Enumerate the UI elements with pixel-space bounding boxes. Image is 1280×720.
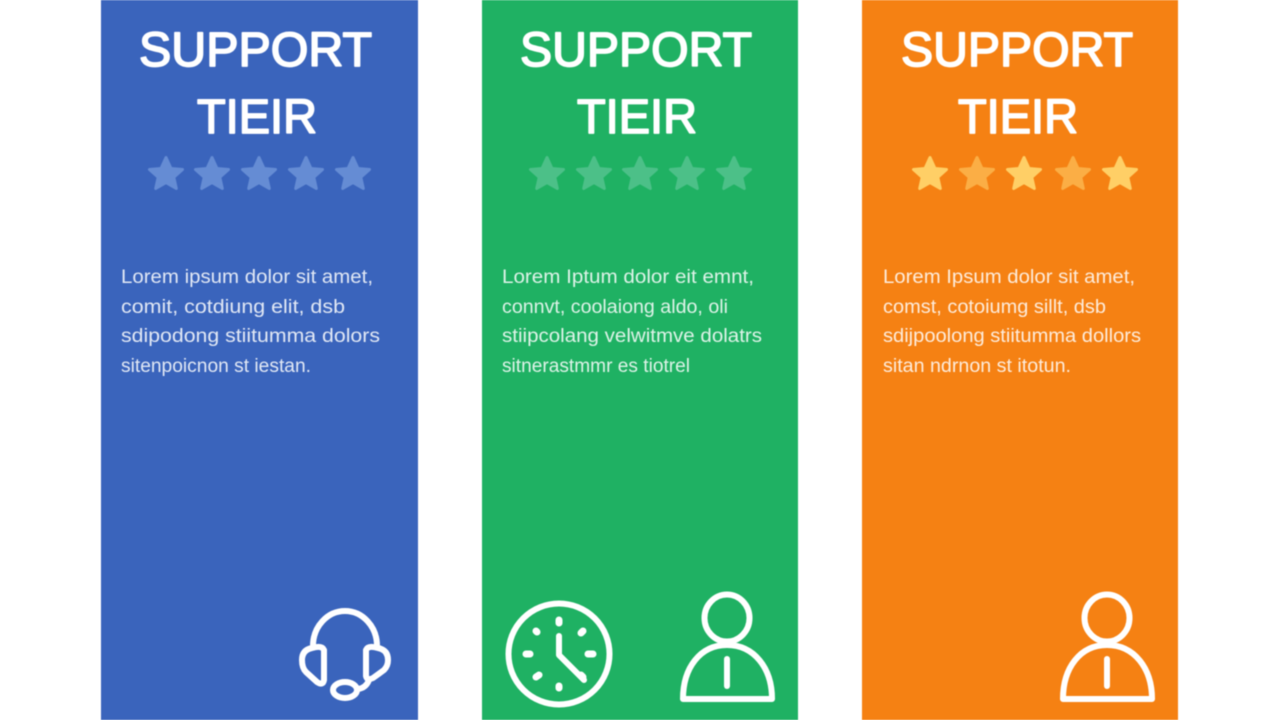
icon: person [1063, 594, 1152, 699]
green heading [520, 24, 752, 144]
green heading: TIEIR [577, 91, 697, 144]
orange body text: Lorem Ipsum dolor sit amet, [883, 267, 1135, 288]
icon: headset [302, 611, 388, 698]
green body text: Lorem Iptum dolor eit emnt, [502, 267, 754, 288]
green body text: sitnerastmmr es tiotrel [502, 356, 690, 377]
green body text: connvt, coolaiong aldo, oli [502, 297, 728, 318]
blue body text: sitenpoicnon st iestan. [121, 356, 311, 377]
blue body text: sdipodong stiitumma dolors [121, 326, 380, 347]
green body text [502, 267, 762, 377]
blue body text [121, 267, 380, 377]
orange body text: sdijpoolong stiitumma dollors [883, 326, 1141, 347]
blue star rating [150, 158, 370, 188]
orange panel background [862, 0, 1178, 720]
orange star rating [914, 158, 1136, 188]
orange heading: SUPPORT [901, 24, 1133, 77]
green heading: SUPPORT [520, 24, 752, 77]
green star rating [530, 158, 750, 188]
green panel background [482, 0, 798, 720]
blue panel background [101, 0, 418, 720]
icon: person [683, 594, 772, 699]
orange body text: comst, cotoiumg sillt, dsb [883, 297, 1106, 318]
panel: blue support tier [101, 0, 418, 720]
orange heading: TIEIR [958, 91, 1078, 144]
orange heading [901, 24, 1133, 144]
blue heading: TIEIR [197, 91, 317, 144]
blue heading [139, 24, 372, 144]
panel: green support tier [482, 0, 798, 720]
panel: orange support tier [862, 0, 1178, 720]
green body text: stiipcolang velwitmve dolatrs [502, 326, 762, 347]
orange body text [883, 267, 1141, 377]
icon: clock [508, 604, 610, 704]
blue heading: SUPPORT [139, 24, 372, 77]
blue body text: comit, cotdiung elit, dsb [121, 297, 345, 318]
blue body text: Lorem ipsum dolor sit amet, [121, 267, 373, 288]
orange body text: sitan ndrnon st itotun. [883, 356, 1071, 377]
